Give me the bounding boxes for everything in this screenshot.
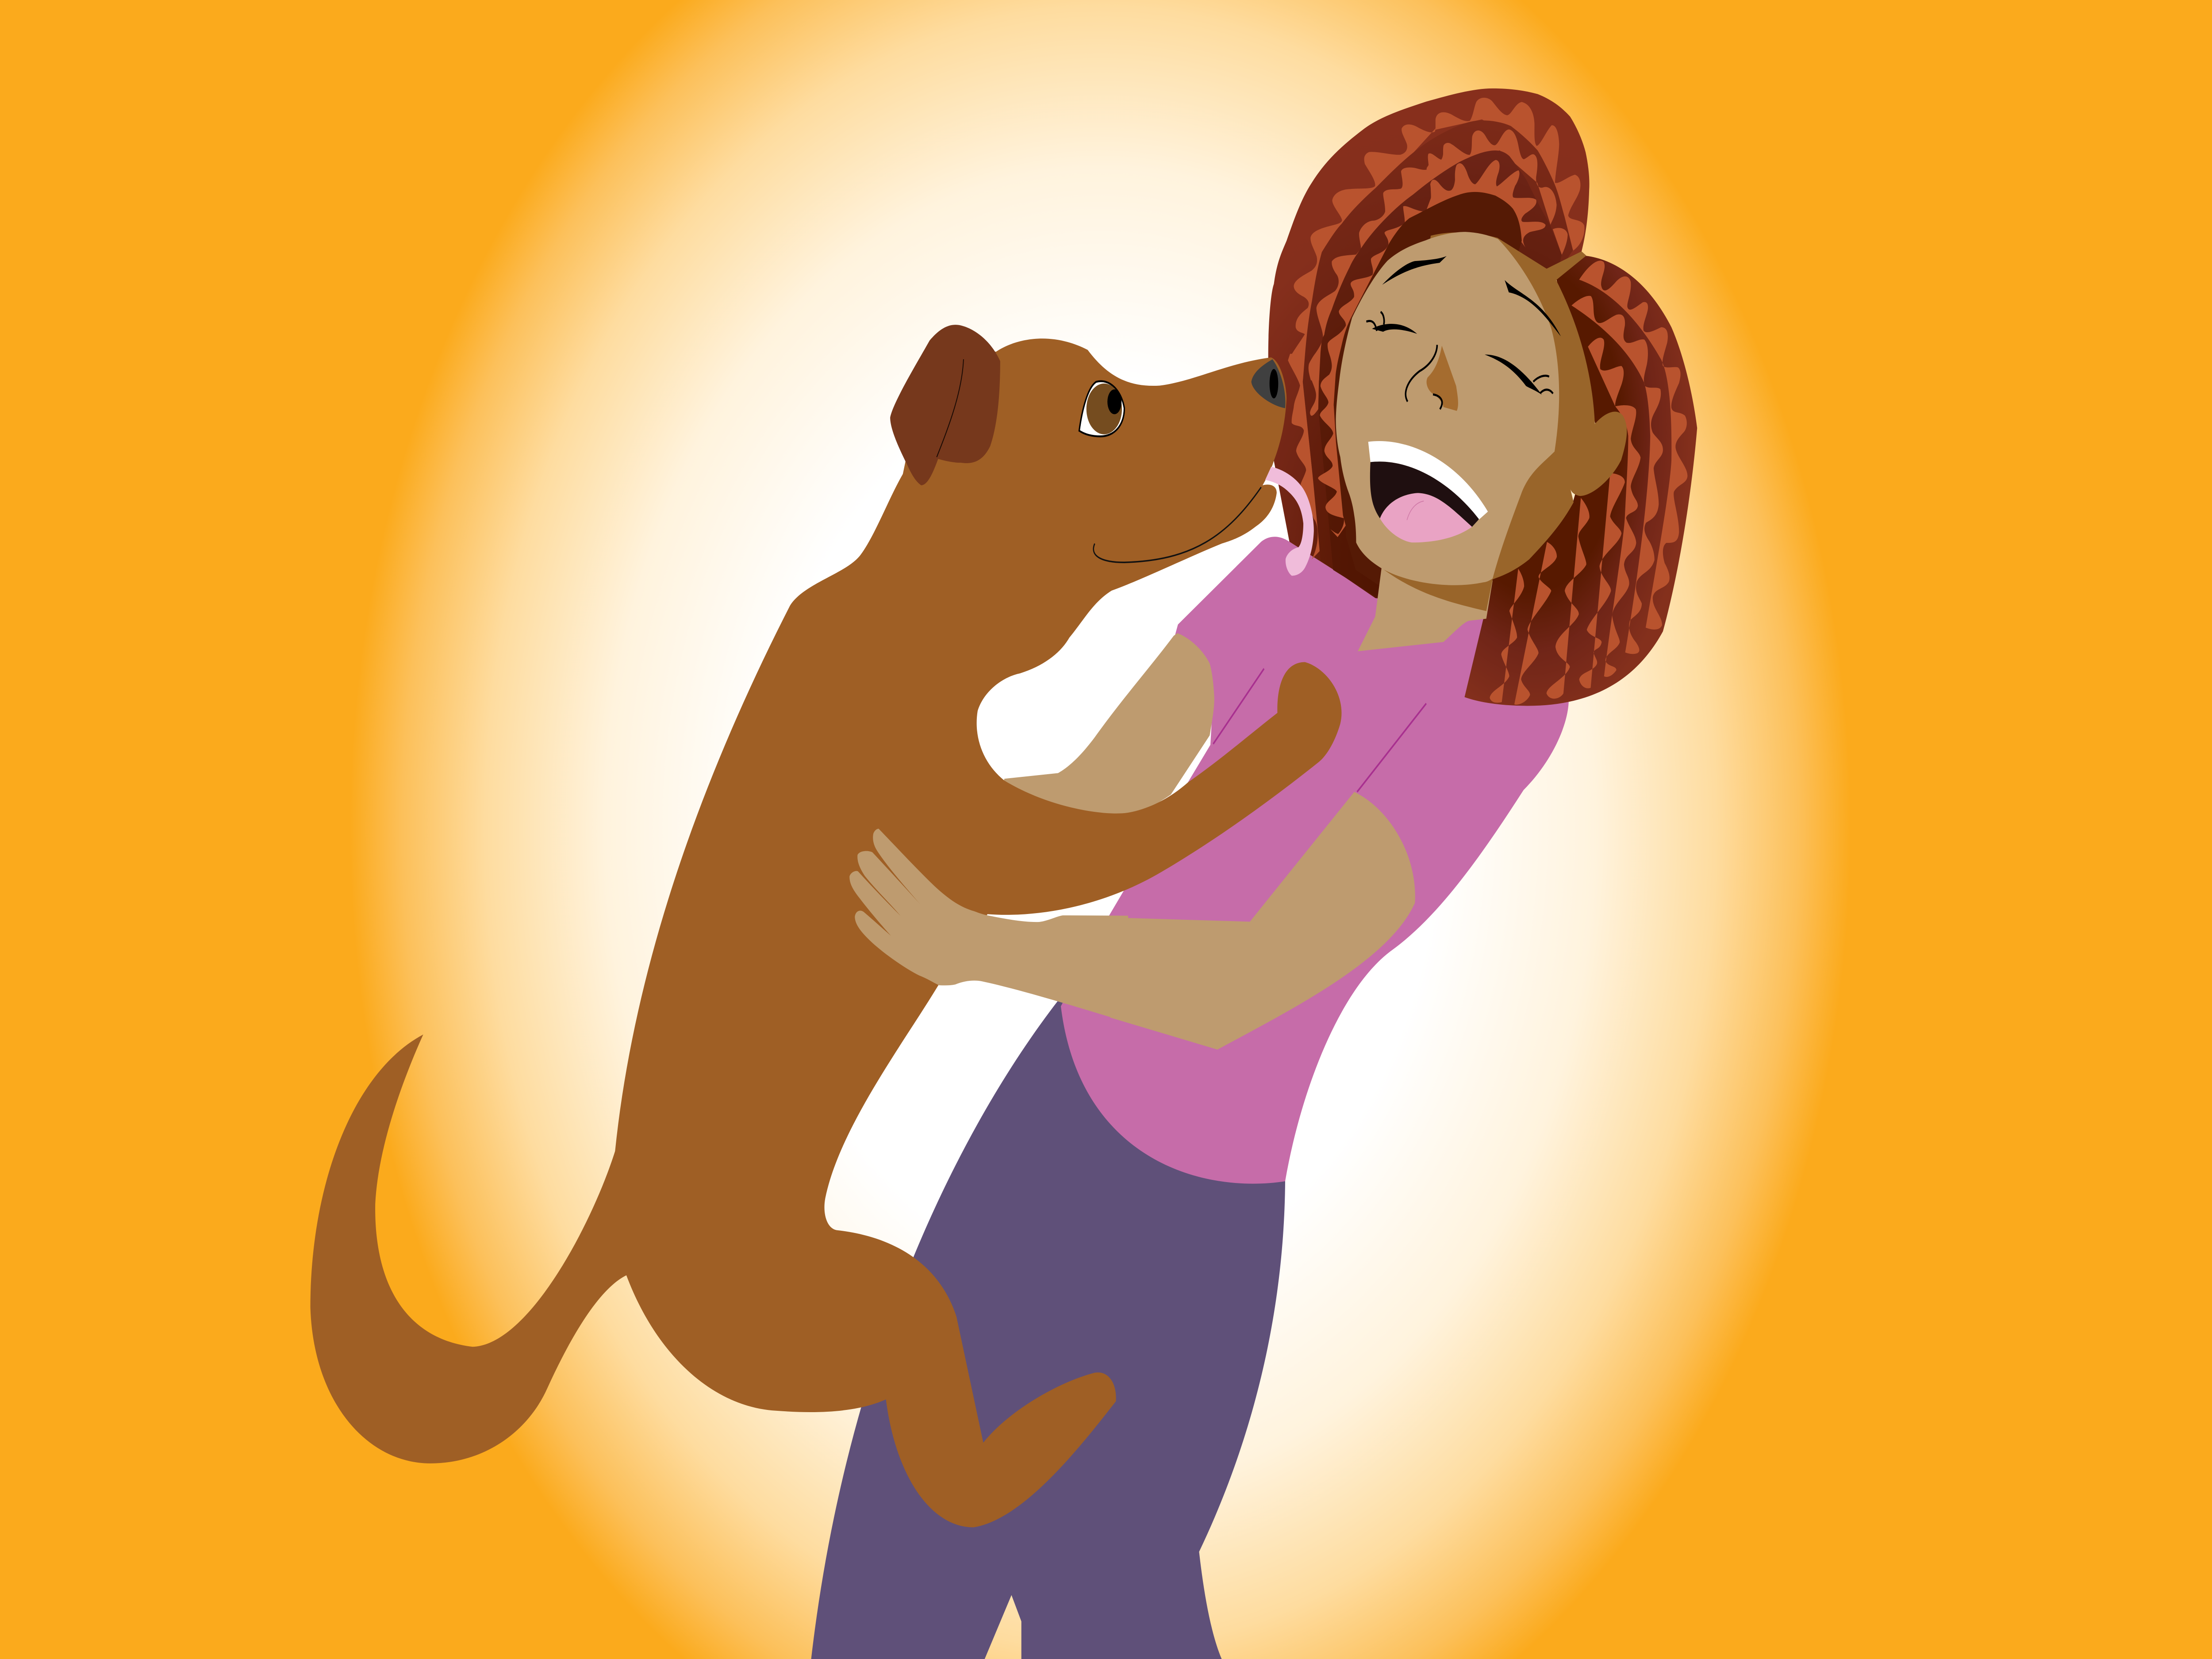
braid band: outer, left section [1288, 115, 1439, 380]
right braid: outer [1579, 261, 1687, 630]
open mouth [1368, 441, 1488, 542]
braid band: outer, top section [1436, 98, 1584, 251]
braid band: outer, lower section [1288, 354, 1321, 560]
dog: tongue licking [1265, 467, 1314, 576]
woman: head, neck and face [1336, 232, 1627, 651]
dog: smile line [1094, 487, 1261, 562]
braid strand C [1547, 498, 1590, 699]
dog: nose [1251, 359, 1285, 408]
hair layer under the first band [1303, 120, 1573, 602]
braid strand D [1579, 473, 1625, 688]
braid band: inner, top section [1427, 160, 1546, 248]
dog: body, legs, tail and head [311, 338, 1341, 1527]
forearm [1062, 792, 1415, 1049]
right braid: inner [1588, 338, 1640, 677]
nose shadow [1427, 346, 1458, 411]
braid band: middle, top section [1427, 130, 1557, 225]
shirt fold lines [1213, 668, 1426, 792]
woman: braided hair, right lobe [1464, 256, 1697, 706]
braid strand B [1514, 542, 1557, 705]
dog: eye [1079, 381, 1124, 436]
eyelashes [1366, 312, 1553, 394]
right braid: middle [1571, 296, 1663, 654]
hair layer under the second band [1318, 150, 1562, 598]
braid band: middle, left section [1309, 143, 1460, 380]
hair base: right lobe [1464, 256, 1697, 706]
head shadow side and ear [1382, 232, 1627, 611]
dog: ear [890, 325, 1000, 485]
hair base: left lobe [1268, 88, 1590, 598]
nose lines [1406, 345, 1442, 409]
braid strand A [1490, 568, 1524, 703]
braid band: inner, lower section [1318, 354, 1346, 537]
braid band: middle, lower section [1309, 354, 1321, 416]
woman: far arm [995, 633, 1214, 816]
neck [1358, 568, 1493, 651]
braid band: inner, left section [1328, 167, 1459, 369]
face [1336, 232, 1559, 585]
woman: pink shirt [1061, 537, 1569, 1184]
hand with fingers [849, 829, 1128, 1018]
woman: braided hair, left lobe [1268, 88, 1590, 602]
braid lobe crossing the divider [1553, 228, 1568, 255]
closed eyes [1366, 312, 1553, 395]
eyebrows [1382, 256, 1561, 336]
dark hair arch around the face [1334, 192, 1522, 587]
woman: near arm and hand [849, 792, 1415, 1049]
woman's tongue [1380, 493, 1472, 542]
woman: pants [811, 978, 1285, 1659]
